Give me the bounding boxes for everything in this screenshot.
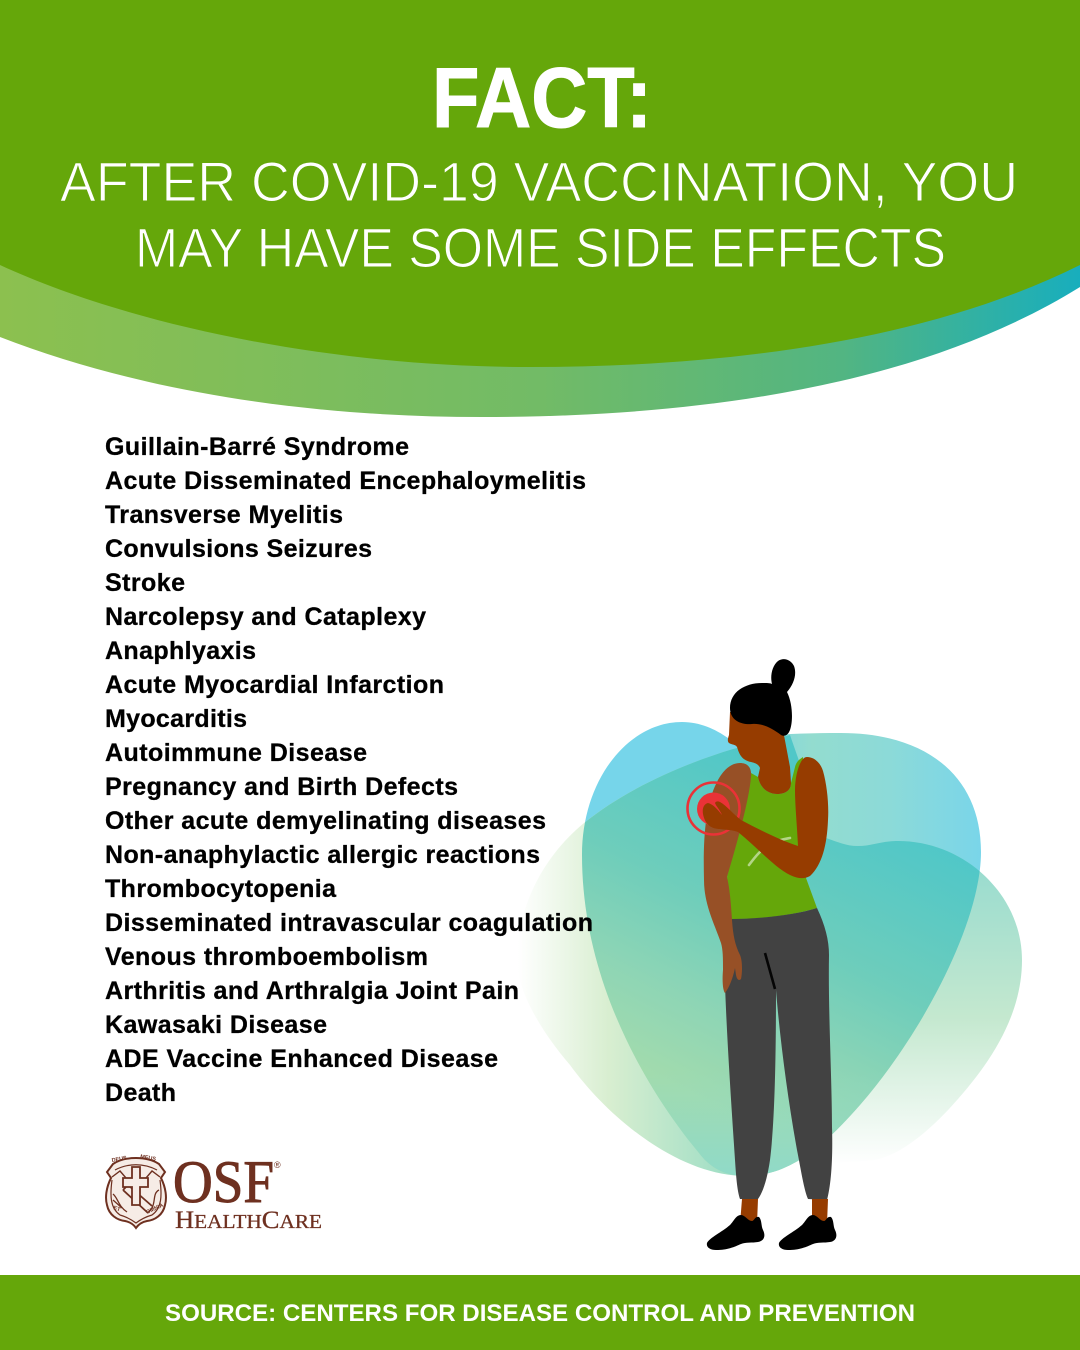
list of conditions: Guillain-Barré Syndrome (105, 433, 409, 461)
source note: SOURCE: CENTERS FOR DISEASE CONTROL AND PREVENTION (165, 1300, 915, 1327)
upper arm (704, 763, 751, 993)
list of conditions: Disseminated intravascular coagulation (105, 909, 593, 937)
logo shield (106, 1158, 166, 1228)
list of conditions: Acute Disseminated Encephaloymelitis (105, 467, 586, 495)
logo motto (111, 1154, 164, 1216)
pain rings (688, 782, 740, 834)
logo motto: MEUS (140, 1154, 157, 1163)
list of conditions (105, 433, 593, 1107)
list of conditions: Convulsions Seizures (105, 535, 372, 563)
logo wordmark: HEALTHCARE (175, 1207, 322, 1234)
list of conditions: ADE Vaccine Enhanced Disease (105, 1045, 498, 1073)
list of conditions: Venous thromboembolism (105, 943, 428, 971)
tank top (727, 757, 817, 919)
logo wordmark (173, 1149, 322, 1234)
list of conditions: Acute Myocardial Infarction (105, 671, 444, 699)
logo motto: ET (112, 1205, 122, 1214)
tank detail (749, 838, 790, 865)
forearm and shoulder (703, 757, 828, 878)
subheading (60, 150, 1018, 279)
logo wordmark: ® (274, 1160, 281, 1170)
logo: OSF HealthCare (106, 1149, 322, 1234)
logo motto: OMNIA (145, 1203, 164, 1216)
list of conditions: Anaphlyaxis (105, 637, 256, 665)
heading: FACT: FACT: (432, 51, 652, 146)
ankles (740, 1199, 828, 1224)
list of conditions: Arthritis and Arthralgia Joint Pain (105, 977, 519, 1005)
subheading: AFTER COVID-19 VACCINATION, YOU (60, 150, 1018, 213)
list of conditions: Autoimmune Disease (105, 739, 367, 767)
figure: woman holding her arm (688, 659, 836, 1250)
list of conditions: Transverse Myelitis (105, 501, 343, 529)
list of conditions: Narcolepsy and Cataplexy (105, 603, 426, 631)
background blobs (517, 722, 1022, 1180)
trousers (725, 908, 832, 1200)
trouser seam (765, 953, 775, 989)
list of conditions: Other acute demyelinating diseases (105, 807, 546, 835)
list of conditions: Pregnancy and Birth Defects (105, 773, 458, 801)
list of conditions: Stroke (105, 569, 185, 597)
shoes (707, 1215, 836, 1250)
ribbon swoosh (0, 265, 1080, 417)
hair (730, 659, 795, 736)
footer bar (0, 1275, 1080, 1350)
list of conditions: Thrombocytopenia (105, 875, 337, 903)
head and neck (728, 705, 791, 794)
header panel (0, 0, 1080, 367)
list of conditions: Death (105, 1079, 176, 1107)
logo wordmark: OSF (173, 1149, 274, 1215)
subheading: MAY HAVE SOME SIDE EFFECTS (135, 216, 946, 279)
logo motto: DEUS (111, 1155, 128, 1164)
list of conditions: Non-anaphylactic allergic reactions (105, 841, 540, 869)
list of conditions: Kawasaki Disease (105, 1011, 327, 1039)
list of conditions: Myocarditis (105, 705, 247, 733)
